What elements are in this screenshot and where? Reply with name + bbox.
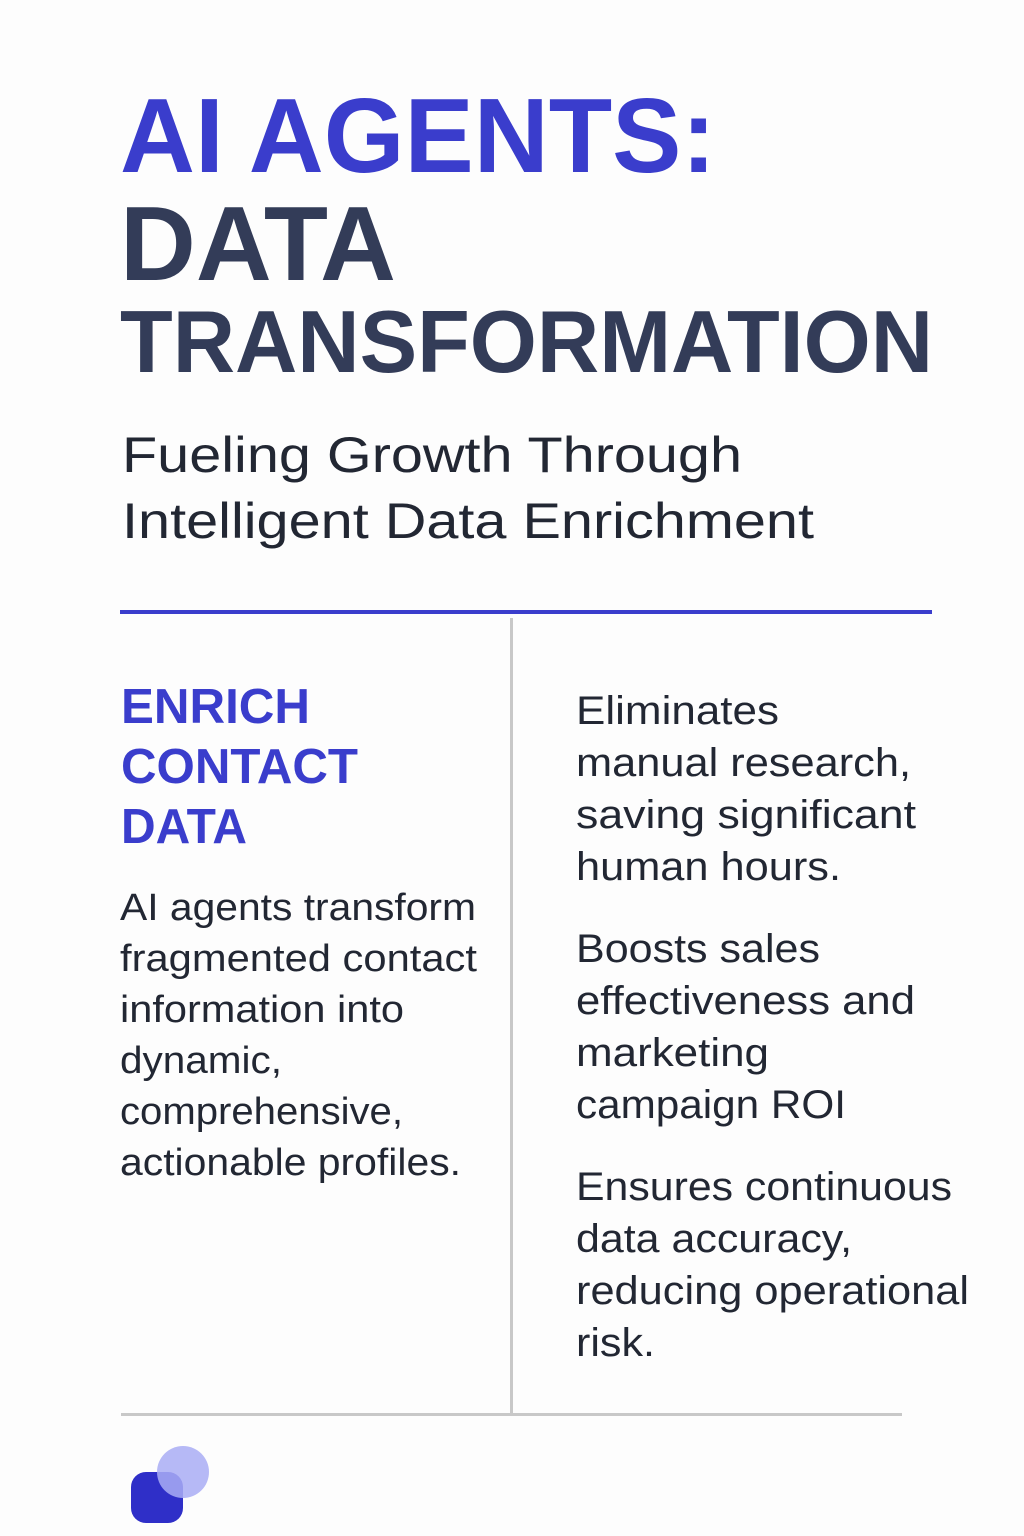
left body text: comprehensive, — [120, 1091, 403, 1133]
right benefit 3: data accuracy, — [576, 1217, 852, 1261]
right benefit 3 — [576, 1165, 969, 1365]
title: DATA — [120, 185, 396, 303]
right benefit 2: campaign ROI — [576, 1083, 846, 1127]
left heading: enrich contact data: DATA — [121, 800, 247, 854]
left body text: information into — [120, 989, 404, 1031]
right benefit 3: risk. — [576, 1321, 655, 1365]
right benefit 1: saving significant — [576, 793, 916, 837]
subtitle: Fueling Growth Through — [122, 427, 742, 483]
right benefit 3: Ensures continuous — [576, 1165, 952, 1209]
right benefit 1: manual research, — [576, 741, 911, 785]
title — [120, 77, 933, 391]
left body text — [120, 887, 477, 1184]
icon: logo — [131, 1446, 209, 1523]
right benefit 1 — [576, 689, 916, 889]
left heading: enrich contact data — [121, 680, 358, 854]
left body text: dynamic, — [120, 1040, 282, 1082]
left heading: enrich contact data: CONTACT — [121, 740, 358, 794]
right benefit 2: Boosts sales — [576, 927, 820, 971]
left body text: fragmented contact — [120, 938, 477, 980]
right benefit 2: marketing — [576, 1031, 769, 1075]
left body text: actionable profiles. — [120, 1142, 461, 1184]
left heading: enrich contact data: ENRICH — [121, 680, 310, 734]
subtitle: Intelligent Data Enrichment — [122, 493, 814, 549]
right benefit 1: human hours. — [576, 845, 841, 889]
right benefit 3: reducing operational — [576, 1269, 969, 1313]
title: TRANSFORMATION — [120, 292, 933, 391]
title: AI AGENTS: — [120, 77, 716, 195]
subtitle — [122, 427, 814, 549]
right benefit 1: Eliminates — [576, 689, 779, 733]
right benefit 2 — [576, 927, 915, 1127]
right benefit 2: effectiveness and — [576, 979, 915, 1023]
left body text: AI agents transform — [120, 887, 476, 929]
